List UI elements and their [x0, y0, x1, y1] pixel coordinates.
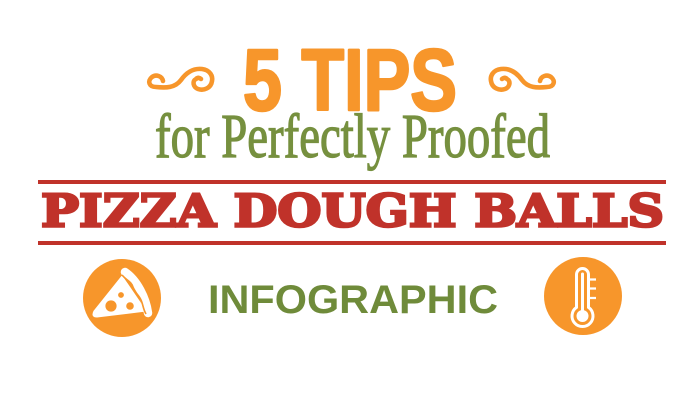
- icon: left orange flourish: [149, 69, 212, 90]
- bottom red rule: [38, 241, 666, 245]
- label: INFOGRAPHIC: INFOGRAPHIC: [208, 278, 498, 322]
- heading: PIZZA DOUGH BALLS: PIZZA DOUGH BALLS: [41, 184, 664, 238]
- subtitle: for Perfectly Proofed: for Perfectly Proofed: [155, 103, 550, 171]
- title: 5 TIPS: 5 TIPS: [243, 32, 457, 129]
- icon: thermometer: [544, 257, 622, 335]
- icon: right orange flourish: [491, 69, 554, 90]
- top red rule: [38, 180, 666, 184]
- icon: pizza slice: [83, 259, 161, 337]
